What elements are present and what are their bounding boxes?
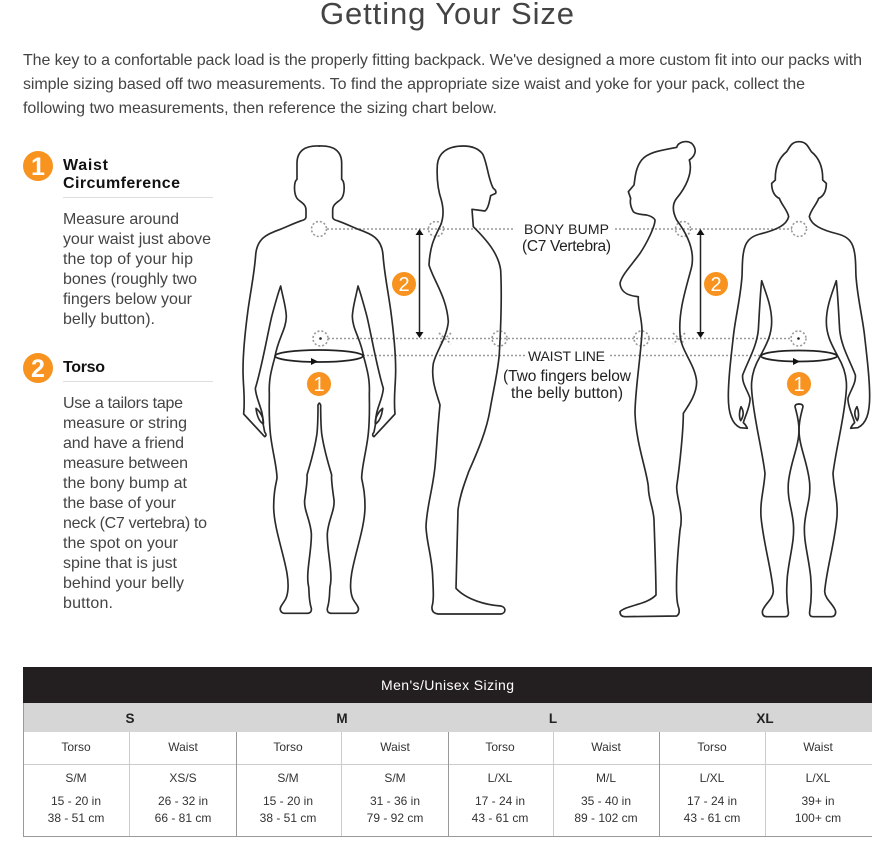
size row: S (125, 711, 135, 726)
column: L waist (574, 740, 638, 825)
column: S waist (155, 740, 211, 825)
heading: waist circumference: Waist (63, 157, 109, 174)
label: waist line: WAIST LINE (528, 348, 605, 364)
column: M torso (260, 740, 316, 825)
intro paragraph: following two measurements, then reference the sizing chart below. (23, 100, 497, 117)
heading: waist circumference: Circumference (63, 175, 180, 192)
column: L torso: L/XL (488, 771, 513, 785)
column: L waist: 35 - 40 in (581, 794, 631, 808)
intro paragraph (23, 52, 862, 117)
text: torso instructions: behind your belly (63, 575, 184, 592)
text: torso instructions: neck (C7 vertebra) to (63, 515, 207, 532)
text: waist instructions: fingers below your (63, 291, 193, 308)
icon: number 2 badge (23, 353, 53, 383)
column: S torso: 15 - 20 in (51, 794, 101, 808)
icon: woman waist badge: 1 (793, 374, 805, 396)
text: torso instructions: and have a friend (63, 435, 184, 452)
text: torso instructions: Use a tailors tape (63, 395, 183, 412)
label: bony bump: BONY BUMP (524, 221, 609, 237)
column: L torso: 17 - 24 in (475, 794, 525, 808)
icon: number 1 badge (23, 151, 53, 181)
column: M waist: 79 - 92 cm (367, 811, 423, 825)
text: waist instructions: belly button). (63, 311, 155, 328)
panel: waist instructions (23, 151, 213, 328)
column: XL torso: 17 - 24 in (687, 794, 737, 808)
column: XL waist: 100+ cm (795, 811, 841, 825)
table header: Men's/Unisex Sizing (381, 677, 514, 693)
text: waist instructions (63, 211, 211, 328)
heading: torso: Torso (63, 359, 105, 376)
column: M waist: 31 - 36 in (370, 794, 420, 808)
column: XL torso: 43 - 61 cm (684, 811, 740, 825)
column: M waist: S/M (384, 771, 406, 785)
column: XL waist: Waist (803, 740, 833, 754)
text: waist instructions: the top of your hip (63, 251, 193, 268)
column: XL waist: L/XL (806, 771, 831, 785)
measurement guide lines (312, 222, 806, 356)
column: L torso (472, 740, 528, 825)
arrow: woman torso length (696, 229, 704, 338)
text: torso instructions: measure or string (63, 415, 187, 432)
icon: woman torso badge: 2 (710, 274, 722, 296)
icon: man waist badge: 1 (313, 374, 325, 396)
label: bony bump: (C7 Vertebra) (522, 238, 611, 255)
arrow: man torso length (416, 229, 424, 338)
icon: man waist badge (307, 372, 331, 396)
sizing table (23, 667, 872, 836)
text: torso instructions: spine that is just (63, 555, 178, 572)
text: torso instructions: the bony bump at (63, 475, 188, 492)
intro paragraph: simple sizing based off two measurements. To find the appropriate size waist and yoke for your pack, collect the (23, 76, 805, 93)
column: S waist: XS/S (169, 771, 197, 785)
label: bony bump (522, 221, 611, 255)
text: torso instructions (63, 395, 207, 612)
table header (23, 667, 872, 703)
waist band: man (275, 350, 363, 365)
icon: man torso badge: 2 (398, 274, 410, 296)
column: M torso: Torso (273, 740, 303, 754)
column: M torso: 15 - 20 in (263, 794, 313, 808)
label: waist line: the belly button) (511, 385, 623, 402)
icon: man torso badge (392, 272, 416, 296)
label: waist line (503, 348, 632, 402)
icon: number 2 badge: 2 (31, 355, 45, 383)
column: S waist: Waist (168, 740, 198, 754)
column: XL waist (795, 740, 841, 825)
column: S torso: Torso (61, 740, 91, 754)
column: L waist: 89 - 102 cm (574, 811, 638, 825)
column: XL torso: L/XL (700, 771, 725, 785)
column: XL torso (684, 740, 740, 825)
waist band: woman (761, 350, 837, 365)
column: M waist: Waist (380, 740, 410, 754)
text: waist instructions: bones (roughly two (63, 271, 197, 288)
text: torso instructions: the spot on your (63, 535, 179, 552)
icon: woman torso badge (704, 272, 728, 296)
column: L torso: 43 - 61 cm (472, 811, 528, 825)
size row (23, 703, 872, 732)
figure: man front view (243, 146, 396, 613)
panel: torso instructions (23, 353, 213, 612)
text: waist instructions: Measure around (63, 211, 179, 228)
intro paragraph: The key to a confortable pack load is the properly fitting backpack. We've designed a more custom fit into our packs with (23, 52, 862, 69)
column: XL waist: 39+ in (801, 794, 835, 808)
label: waist line: (Two fingers below (503, 368, 632, 385)
icon: woman waist badge (787, 372, 811, 396)
column: L waist: Waist (591, 740, 621, 754)
size row: XL (756, 711, 774, 726)
figure: woman front view (728, 142, 870, 617)
column: L torso: Torso (485, 740, 515, 754)
figure: man side view (426, 146, 505, 614)
column: S waist: 66 - 81 cm (155, 811, 211, 825)
column: L waist: M/L (596, 771, 616, 785)
column: S waist: 26 - 32 in (158, 794, 208, 808)
column: M torso: S/M (277, 771, 299, 785)
size row: L (549, 711, 557, 726)
column: M torso: 38 - 51 cm (260, 811, 316, 825)
column: M waist (367, 740, 423, 825)
size row: M (336, 711, 348, 726)
text: torso instructions: button. (63, 595, 113, 612)
heading: waist circumference (63, 157, 180, 192)
text: waist instructions: your waist just above (63, 231, 211, 248)
text: torso instructions: measure between (63, 455, 188, 472)
figure: woman side view (620, 142, 697, 617)
icon: number 1 badge: 1 (31, 153, 45, 181)
column: S torso: S/M (65, 771, 87, 785)
column: S torso: 38 - 51 cm (48, 811, 104, 825)
text: torso instructions: the base of your (63, 495, 177, 512)
column: XL torso: Torso (697, 740, 727, 754)
column: S torso (48, 740, 104, 825)
